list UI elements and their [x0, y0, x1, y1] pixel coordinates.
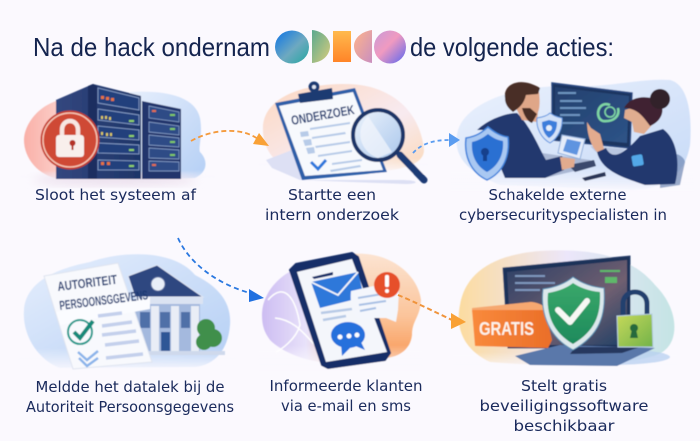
panel: informeerde klanten	[258, 253, 423, 415]
title text left: Na de hack ondernam	[33, 32, 270, 62]
arrow: blue from step 3 to step 4	[178, 238, 264, 302]
icon: green shield	[542, 277, 604, 350]
icon: keyhole shield	[466, 127, 508, 180]
illustration: laptop, shield, box and padlock	[452, 250, 678, 372]
label line 2: beveiligingssoftware	[480, 397, 648, 415]
illustration: server with padlock	[20, 84, 215, 186]
label line 2: cybersecurityspecialisten in	[459, 206, 667, 224]
document	[44, 263, 152, 369]
illustration: document and building	[18, 254, 236, 372]
label line 3: beschikbaar	[514, 417, 615, 435]
laptop	[503, 256, 655, 366]
icon: clipboard clip	[298, 82, 333, 103]
label line 1: Informeerde klanten	[270, 377, 422, 395]
title	[33, 30, 614, 64]
label line 1: Schakelde externe	[488, 186, 626, 204]
illustration: two specialists at monitor	[450, 80, 695, 192]
icon: padlock	[617, 292, 653, 347]
panel: externe specialisten	[450, 80, 695, 224]
man	[477, 113, 564, 178]
icon: small shield	[537, 113, 562, 143]
woman	[660, 153, 685, 188]
document heading line 1: AUTORITEIT	[57, 272, 118, 294]
label line 1: Meldde het datalek bij de	[36, 378, 224, 396]
illustration: clipboard and magnifier	[258, 82, 428, 184]
icon: orange GRATIS box: GRATIS	[479, 319, 534, 339]
label line 1: Startte een	[288, 186, 376, 204]
label line 2: Autoriteit Persoonsgegevens	[26, 398, 234, 416]
label: Sloot het systeem af	[35, 186, 197, 204]
label line 2: intern onderzoek	[265, 206, 399, 224]
icon: notification bubble	[351, 272, 400, 322]
icon: red padlock badge	[40, 110, 100, 170]
icon: magnifier	[353, 110, 424, 180]
arrow: orange from step 1 to step 2	[191, 131, 269, 146]
title text right: de volgende acties:	[410, 32, 614, 62]
icon: orange GRATIS box	[472, 302, 552, 348]
panel: autoriteit persoonsgegevens	[18, 254, 236, 416]
icon: small tablet	[558, 135, 585, 159]
clipboard heading: ONDERZOEK	[290, 102, 356, 128]
panel: sloot het systeem af	[20, 84, 215, 204]
phone	[290, 253, 390, 368]
panel: startte een intern onderzoek	[258, 82, 428, 224]
icon: envelope	[311, 272, 364, 308]
icon: chat bubble	[331, 322, 365, 356]
logo: Odido	[275, 30, 406, 64]
label line 1: Stelt gratis	[521, 377, 607, 395]
tree	[196, 319, 222, 350]
illustration: phone with messages	[258, 253, 423, 371]
arrow: blue from step 2 to step 3	[413, 133, 460, 153]
label line 2: via e-mail en sms	[281, 397, 411, 415]
document heading line 2: PERSOONSGGEVENS	[59, 287, 149, 313]
panel: gratis beveiligingssoftware	[452, 250, 678, 435]
arrow: orange from step 5 to step 6	[398, 295, 466, 329]
building	[128, 265, 225, 355]
